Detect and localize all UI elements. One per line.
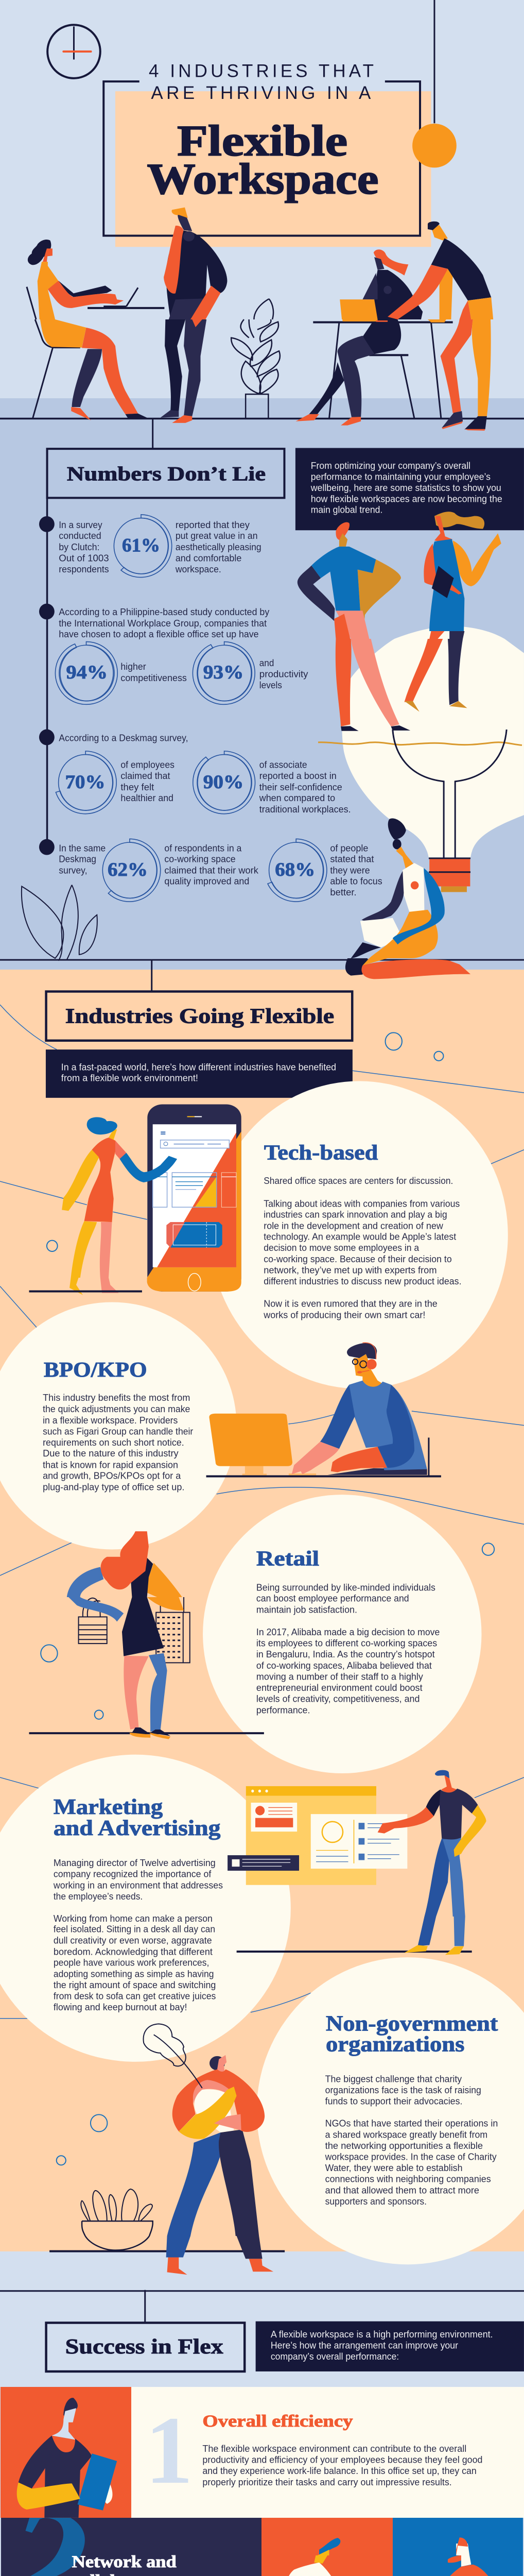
illustration: man with folder [17, 2398, 117, 2518]
panel: bpo kpo: that is known for rapid expansion [43, 1460, 178, 1470]
stat: 93 percent [193, 642, 308, 704]
stat: 62 percent: survey, [59, 866, 87, 876]
illustration: man pointing at dashboard [237, 1770, 486, 1955]
panel: tech-based: decision to move some employees in a [264, 1243, 419, 1253]
panel: retail [203, 1495, 481, 1773]
panel: success intro [256, 2321, 524, 2371]
panel: retail: levels of creativity, competitiveness, and [256, 1694, 420, 1704]
stat: 70 percent [56, 751, 174, 814]
panel: industries intro [46, 1049, 353, 1098]
illustration: woman with shopping bags [29, 1531, 264, 1739]
panel: retail: can boost employee performance and [256, 1594, 409, 1604]
stat: 61 percent: conducted [59, 531, 101, 541]
stat: 61 percent: 61% [122, 534, 160, 555]
panel: bpo kpo: BPO/KPO [44, 1358, 147, 1381]
stat: 90 percent: of associate [259, 760, 307, 770]
stat: 61 percent: reported that they [176, 520, 250, 530]
stat: 61 percent: by Clutch: [59, 543, 99, 552]
panel: tech-based [211, 1081, 508, 1388]
stat: 93 percent: productivity [259, 669, 308, 680]
panel: industries heading: Industries Going Flexible [65, 1005, 334, 1028]
hot air balloon [318, 626, 524, 892]
text: philippine study: have chosen to adopt a flexible office set up have [59, 630, 258, 640]
panel: retail: entrepreneurial environment could boost [256, 1683, 423, 1693]
stat: 70 percent: healthier and [120, 793, 173, 804]
panel: numbers intro: main global trend. [311, 505, 382, 515]
text: philippine study: the International Workplace Group, companies that [59, 618, 267, 629]
title [147, 61, 379, 203]
illustration: plant outline [22, 885, 97, 961]
panel: retail: maintain job satisfaction. [256, 1605, 357, 1615]
stat: 62 percent: 62% [108, 859, 148, 880]
stat: 61 percent: and comfortable [176, 553, 241, 564]
divider and connector [0, 2290, 524, 2323]
stat: 62 percent: quality improved and [164, 876, 249, 887]
stat: 62 percent: Deskmag [59, 854, 96, 865]
panel: bpo kpo [0, 1302, 237, 1549]
timeline [39, 498, 55, 855]
panel: industries heading [46, 991, 352, 1041]
panel: marketing and advertising: the right amount of space and switching [54, 1980, 216, 1990]
panel: bpo kpo: requirements on such short notice. [43, 1437, 184, 1448]
connector: floor to heading [152, 419, 153, 449]
stat: 68 percent: of people [330, 843, 368, 854]
illustration: man holding leaf and papers [144, 2024, 273, 2275]
panel: bpo kpo: This industry benefits the most from [43, 1393, 190, 1403]
text: deskmag survey: According to a Deskmag survey, [59, 733, 188, 743]
illustration: woman reading [0, 818, 524, 979]
panel: marketing and advertising: adopting something as simple as having [54, 1969, 214, 1979]
stat: 70 percent: 70% [65, 771, 105, 792]
connector: to industries heading [151, 960, 152, 991]
stat: 94 percent: competitiveness [120, 673, 187, 683]
stat: 94 percent [55, 642, 187, 704]
panel: industries intro: from a flexible work environment! [61, 1073, 198, 1083]
icon: wall clock [47, 25, 100, 78]
panel: non-government organizations [257, 1957, 524, 2264]
panel: tech-based: works of producing their own smart car! [263, 1310, 425, 1320]
stat: 93 percent: 93% [203, 662, 243, 683]
stat: 61 percent: In a survey [59, 520, 102, 530]
stat: 68 percent [268, 839, 382, 902]
stat: 62 percent: co-working space [164, 854, 236, 865]
stat: 90 percent: 90% [203, 771, 243, 792]
stat: 90 percent [193, 751, 351, 815]
panel: marketing and advertising: people have various work preferences, [54, 1958, 209, 1968]
illustration: seated woman [296, 249, 453, 426]
stat: 61 percent: aesthetically pleasing [176, 543, 261, 552]
stat: 68 percent: stated that [330, 854, 374, 865]
stat: 93 percent: and [259, 658, 274, 668]
panel: numbers heading [47, 449, 284, 498]
stat: 61 percent: put great value in an [176, 531, 258, 541]
stat: 62 percent [59, 839, 258, 902]
illustration: potted plant [231, 299, 280, 419]
illustration: handshake [283, 2537, 499, 2576]
panel: retail: Retail [256, 1547, 319, 1570]
hero: title frame [103, 81, 420, 235]
illustration: man on balloon [298, 522, 410, 731]
illustration: smartphone [147, 1105, 241, 1292]
stat: 61 percent [59, 515, 261, 578]
panel: marketing and advertising: dull creativity or even worse, aggravate [54, 1936, 212, 1946]
stat: 94 percent: higher [120, 662, 146, 672]
stat: 68 percent: 68% [275, 859, 315, 880]
panel: marketing and advertising: flowing and keep burnout at bay! [54, 2002, 187, 2012]
stat: 61 percent: Out of 1003 [59, 553, 109, 564]
illustration: woman at laptop [27, 240, 164, 420]
panel: marketing and advertising: from desk to sofa can get creative juices [54, 1991, 216, 2002]
stat: 93 percent: levels [259, 681, 282, 690]
title: 4 INDUSTRIES THAT [149, 61, 374, 81]
stat: 68 percent: better. [330, 888, 357, 898]
illustration: potted plant outline [49, 2189, 285, 2251]
panel: marketing and advertising: company recognized the importance of [54, 1869, 211, 1879]
grid: colour blocks [1, 2387, 524, 2576]
stat: 90 percent: traditional workplaces. [259, 804, 351, 815]
item 2: network and collaborate: Network and [72, 2552, 177, 2571]
illustration: leaning man [388, 222, 493, 431]
title: Workspace [147, 155, 379, 203]
title: Flexible [177, 116, 347, 165]
illustration: standing man [161, 208, 227, 423]
floor line [0, 418, 524, 419]
illustration: call center agent at desk [206, 1343, 441, 1477]
panel: retail: performance. [256, 1705, 310, 1716]
illustration: woman at phone [29, 1117, 177, 1295]
stat: 62 percent: In the same [59, 843, 106, 854]
stat: 62 percent: of respondents in a [164, 843, 242, 854]
panel: tech-based: Tech-based [264, 1141, 378, 1164]
panel: marketing and advertising [0, 1755, 291, 2062]
panel: marketing and advertising: Managing director of Twelve advertising [54, 1858, 216, 1868]
panel: bpo kpo: the quick adjustments you can make [43, 1404, 190, 1414]
hero: peach panel [115, 91, 431, 247]
panel: bpo kpo: plug-and-play type of office set up. [43, 1482, 184, 1493]
panel: bpo kpo: Due to the nature of this industry [43, 1449, 179, 1459]
panel: numbers intro [295, 448, 524, 530]
panel: industries intro: In a fast-paced world, here’s how different industries have benefited [61, 1062, 336, 1073]
panel: marketing and advertising: the employee’s needs. [54, 1892, 143, 1902]
stat: 61 percent: workspace. [175, 565, 221, 575]
icon: pendant lamp [412, 0, 457, 167]
panel: numbers heading: Numbers Don’t Lie [67, 463, 266, 485]
illustration: browser window dashboard [228, 1786, 407, 1885]
panel: success intro: company’s overall performance: [271, 2352, 399, 2362]
panel: bpo kpo: and growth, BPOs/KPOs opt for a [43, 1471, 181, 1481]
stat: 90 percent: when compared to [259, 793, 335, 804]
panel: success heading: Success in Flex [65, 2335, 223, 2359]
stat: 90 percent: reported a boost in [259, 771, 337, 781]
illustration: woman on balloon [405, 512, 501, 712]
item 1: overall efficiency: Overall efficiency [202, 2412, 353, 2430]
text: philippine study: According to a Philippine-based study conducted by [59, 607, 270, 618]
panel: bpo kpo: such as Figari Group can handle their [43, 1427, 193, 1437]
panel: marketing and advertising: Marketing [54, 1795, 163, 1819]
panel: marketing and advertising: working in an environment that addresses [53, 1880, 223, 1891]
stat: 70 percent: claimed that [120, 771, 170, 781]
stat: 68 percent: they were [330, 866, 370, 876]
stat: 61 percent: respondents [59, 565, 109, 575]
title: ARE THRIVING IN A [151, 83, 371, 103]
stat: 68 percent: able to focus [330, 876, 382, 887]
panel: marketing and advertising: Working from home can make a person [54, 1913, 213, 1924]
stat: 90 percent: their self-confidence [259, 782, 342, 792]
panel: bpo kpo: in a flexible workspace. Providers [43, 1416, 178, 1426]
panel: success heading [46, 2323, 244, 2371]
decorative peach lines [0, 1005, 524, 2019]
stat: 62 percent: claimed that their work [164, 866, 258, 876]
panel: marketing and advertising: feel isolated. Sitting in a desk all day can [54, 1924, 215, 1935]
stat: 70 percent: of employees [120, 760, 174, 770]
panel: non-government organizations: supporters and sponsors. [325, 2197, 427, 2207]
stat: 94 percent: 94% [66, 662, 108, 683]
stat: 70 percent: they felt [120, 782, 154, 792]
numeral 1: 1 [145, 2396, 193, 2504]
text: philippine study [59, 607, 270, 640]
item 1: overall efficiency [202, 2412, 482, 2487]
panel: marketing and advertising: boredom. Acknowledging that different [54, 1947, 213, 1957]
panel: marketing and advertising: and Advertising [54, 1816, 220, 1840]
decorative circles [41, 1032, 494, 2165]
